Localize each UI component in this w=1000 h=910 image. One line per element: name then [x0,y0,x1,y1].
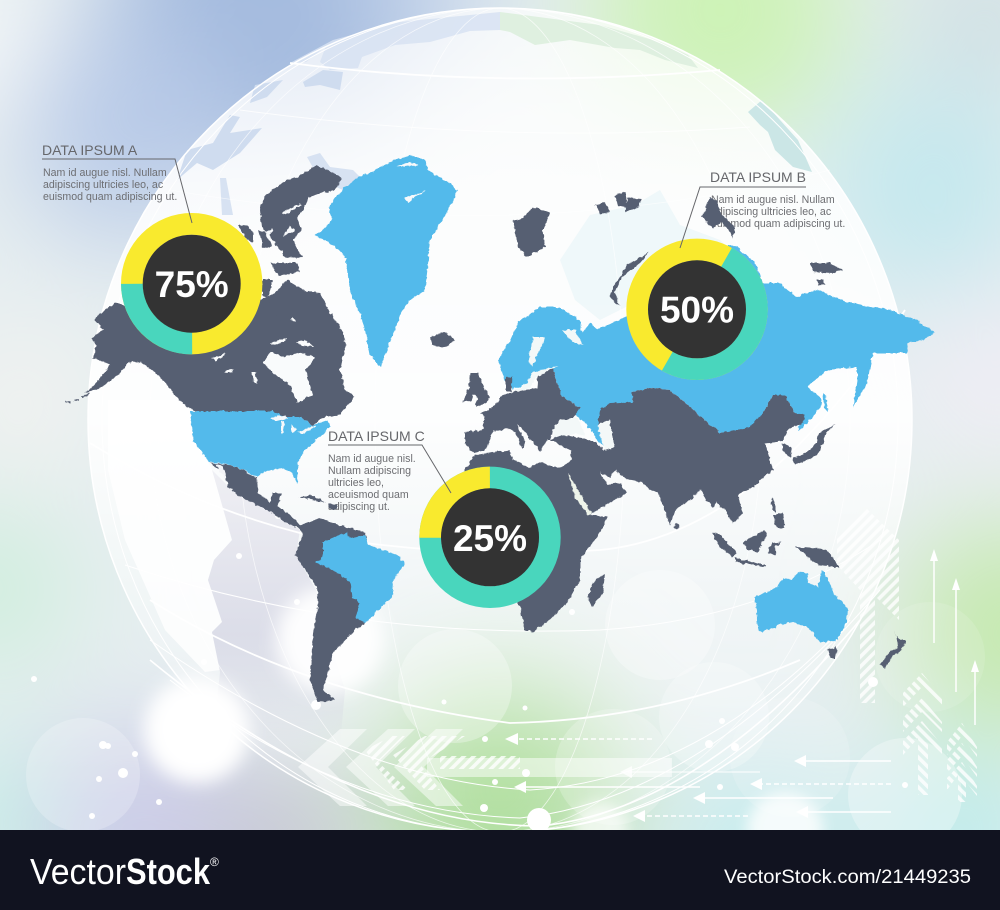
iceland [430,332,455,348]
scattered light dots [31,513,908,832]
ghost land: lavender shade [208,471,344,710]
north america dark landmass [85,280,355,425]
globe body [88,8,912,832]
text block: data ipsum C [328,428,425,513]
hudson bay [263,352,315,403]
leader C [328,445,451,493]
red sea [568,473,592,515]
black sea [553,418,585,438]
europe [465,368,580,453]
hub A [143,235,241,333]
text block: data ipsum A: Nam id augue nisl. Nullam [43,167,167,179]
korea [782,443,792,458]
africa and asia [425,388,805,632]
russia and scandinavia [498,245,935,447]
donut callout C [328,445,550,597]
ring A yellow [132,224,252,344]
brazil [315,532,405,623]
ghost land: arctic island [303,70,343,90]
ghost land: sliver [220,178,233,215]
baja gulf [216,464,228,485]
ghost land: arctic island small [250,80,283,103]
text block: data ipsum A: euismod quam adipiscing ut. [43,191,177,203]
new zealand [879,630,907,668]
text block: data ipsum B: DATA IPSUM B [710,169,806,185]
ring B yellow [637,249,757,369]
ring B teal [615,228,779,391]
ghost land: pale arctic ocean basin [560,190,723,320]
indonesia and philippines [712,498,840,568]
alaska aleutian tail [65,393,90,402]
ghost land: north right rim [500,12,698,68]
globe grid lines [88,8,912,832]
text block: data ipsum A: adipiscing ultricies leo, ac [43,179,164,191]
text block: data ipsum B [710,169,845,230]
arctic canada islands [238,165,342,325]
denmark [506,376,512,392]
ring A teal [132,224,252,344]
footer bar [0,830,1000,910]
greenland [315,155,458,367]
donut callout B [615,187,806,391]
hatched chevrons bottom [365,736,520,790]
text block: data ipsum C: adipiscing ut. [328,501,390,513]
novaya zemlya [610,252,650,307]
svalbard [513,207,550,257]
greenland fjords [397,162,426,203]
leader A [42,159,192,223]
pale chevrons bottom [298,729,672,806]
ghost land: arctic shelf [177,115,262,180]
text block: data ipsum A: DATA IPSUM A [42,142,138,158]
text block: data ipsum B: Nam id augue nisl. Nullam [711,194,835,206]
leader B [680,187,806,248]
text block: data ipsum B: euismod quam adipiscing ut. [711,218,845,230]
donut callout A [42,159,252,344]
severnaya zemlya [702,198,735,238]
usa [190,411,330,483]
footer logo: Stock [126,851,211,892]
sri lanka [674,523,680,529]
hub B [648,260,746,358]
ghost land: behind greenland [307,153,363,190]
horizontal arrows [505,733,891,822]
baltic and white sea [513,330,583,392]
cuba and hispaniola [298,495,338,509]
hatched chevrons right stack [903,673,942,795]
text block: data ipsum C: Nullam adipiscing [328,465,411,477]
value A: 75% [155,264,229,305]
great britain [468,373,490,407]
footer logo: Vector [30,851,126,892]
tasmania [827,647,837,658]
text block: data ipsum B: adipiscing ultricies leo, ac [711,206,832,218]
ice channels in ellesmere [266,204,302,236]
hub C [441,488,539,586]
sakhalin [823,393,828,412]
ring C teal [430,478,550,597]
vertical arrows [930,549,979,725]
australia [755,570,848,643]
world map [65,155,935,702]
footer logo [30,851,219,892]
value C: 25% [453,518,527,559]
hatched chevrons far right stack [947,723,977,802]
ghost land: north pacific rim [290,12,500,70]
text block: data ipsum C: aceuismod quam [328,489,409,501]
text block: data ipsum A [42,142,177,203]
bokeh lights [26,585,962,830]
ghost land: north-east rim [748,100,812,172]
footer logo: ® [210,855,219,869]
japan [793,425,835,465]
new siberian islands [810,263,843,285]
footer image id: VectorStock.com/21449235 [724,867,971,888]
caspian sea [598,419,615,450]
text block: data ipsum C: DATA IPSUM C [328,428,425,444]
ghost land: pacific white mass [124,532,228,672]
text block: data ipsum C: ultricies leo, [328,477,384,489]
south america [295,518,392,702]
canadian lakes [212,310,314,383]
madagascar [588,573,605,607]
mexico and central america [210,463,302,530]
ireland [463,390,473,402]
franz josef land [595,192,642,214]
text block: data ipsum C: Nam id augue nisl. [328,453,416,465]
large hatched up arrow [837,507,899,703]
great lakes [270,415,316,434]
ring C yellow [430,478,550,597]
value B: 50% [660,290,734,331]
